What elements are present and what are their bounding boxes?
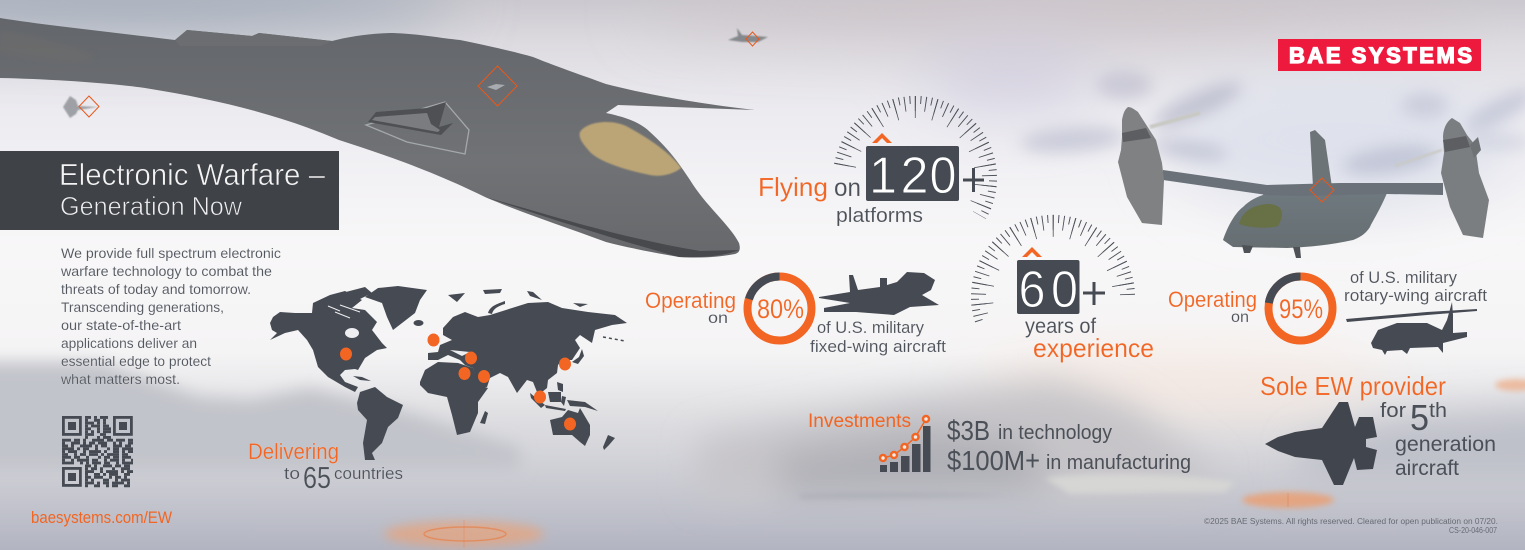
stat: operating on 95% rotary-wing: rotary-wing aircraft <box>1344 286 1487 305</box>
intro text block: Transcending generations, <box>61 299 224 315</box>
tail fin <box>1310 130 1332 187</box>
Africa <box>420 362 488 435</box>
stat: investments: Investments <box>808 411 911 432</box>
counter digits: 1 <box>869 147 897 205</box>
stat: 60+ years of experience: years of <box>1025 315 1096 338</box>
copyright note: CS-20-046-007 <box>1449 526 1497 535</box>
Japan <box>572 349 584 364</box>
title banner <box>0 151 339 230</box>
stat: sole EW provider: Sole EW provider <box>1260 371 1446 401</box>
Indonesia and Philippines <box>530 382 598 411</box>
donut 80 percent <box>748 276 812 340</box>
rotor blur <box>1019 71 1525 180</box>
stat: investments: in manufacturing <box>1046 452 1191 474</box>
Arctic Eurasia islands <box>448 289 588 307</box>
website link: baesystems.com/EW <box>31 508 172 527</box>
stat: operating on 80% fixed-wing: on <box>708 310 728 327</box>
stat: operating on 80% fixed-wing: of U.S. military <box>817 318 924 337</box>
stat: flying on 120+ platforms: Flying <box>758 172 828 202</box>
stat: operating on 95% rotary-wing: Operating <box>1168 287 1257 312</box>
stat: delivering to 65 countries <box>248 439 403 495</box>
copyright note: ©2025 BAE Systems. All rights reserved. Cleared for open publication on 07/20. <box>1204 517 1498 526</box>
stat: sole EW provider: aircraft <box>1395 457 1459 480</box>
icon: small aircraft with diamond, top <box>728 28 768 46</box>
stat: delivering to 65 countries: 65 <box>303 460 331 495</box>
right nacelle <box>1441 118 1489 238</box>
intro text block: We provide full spectrum electronic <box>61 245 281 261</box>
stat: operating on 95% rotary-wing: on <box>1231 309 1249 326</box>
caret <box>1022 247 1042 257</box>
fuselage <box>1223 186 1387 248</box>
stat: operating on 80% fixed-wing: fixed-wing aircraft <box>810 337 946 356</box>
donut 95 percent <box>1268 276 1332 340</box>
Iceland <box>414 320 424 326</box>
counter digits <box>1017 260 1080 319</box>
Kuril islands <box>603 337 625 341</box>
counter digits: 0 <box>930 147 956 205</box>
copyright note <box>1204 517 1498 535</box>
intro text block: threats of today and tomorrow. <box>61 281 251 297</box>
stat: investments: $3B <box>947 415 990 446</box>
stat: delivering to 65 countries: countries <box>334 464 403 483</box>
intro text block: essential edge to protect <box>61 353 211 369</box>
counter digits: 2 <box>900 147 928 205</box>
icon: small fighter with diamond, left <box>63 96 99 118</box>
main stealth aircraft <box>0 18 755 258</box>
stat: sole EW provider: 5 <box>1410 397 1429 438</box>
stat: 60+ years of experience: experience <box>1033 333 1154 363</box>
orange radar target: right edge <box>1495 379 1525 391</box>
Hudson Bay and Great Lakes cut-outs <box>328 305 470 356</box>
icon: helicopter silhouette <box>1346 302 1477 355</box>
Cuba <box>353 376 371 381</box>
icon: F-35 silhouette <box>1265 402 1377 485</box>
stat: sole EW provider: for <box>1380 400 1406 422</box>
counter digits <box>866 146 959 205</box>
Australia <box>550 408 590 446</box>
tracking diamond <box>1310 178 1334 202</box>
intro text block <box>60 245 281 387</box>
intro text block: what matters most. <box>60 371 180 387</box>
stat: flying on 120+ platforms: on <box>834 174 861 202</box>
gauge ticks <box>838 100 993 217</box>
caret <box>872 133 892 143</box>
Eurasia <box>428 302 627 393</box>
stat: flying on 120+ platforms: platforms <box>836 205 923 227</box>
title banner: Generation Now <box>60 191 242 221</box>
orange radar target: lower right <box>1242 492 1334 508</box>
stat: operating on 95% rotary-wing: 95% <box>1279 294 1323 324</box>
intake vent <box>366 102 469 154</box>
South America <box>357 387 403 460</box>
stat: operating on 80% fixed-wing: Operating <box>645 288 736 313</box>
stat: operating on 95% rotary-wing <box>1168 268 1487 355</box>
North America <box>270 291 387 392</box>
world map <box>270 286 627 460</box>
intro text block: applications deliver an <box>61 335 197 351</box>
icon: rising bar chart <box>880 416 930 472</box>
map location dots <box>340 334 576 430</box>
stat: investments: $100M+ <box>947 445 1040 476</box>
canopy <box>580 122 681 176</box>
QR code <box>62 417 133 486</box>
stat: 60+ years of experience <box>975 219 1154 363</box>
gauge ticks <box>975 219 1131 322</box>
stat: sole EW provider: generation <box>1395 433 1496 456</box>
stat: delivering to 65 countries: Delivering <box>248 439 339 464</box>
icon: tracked aircraft diamond, centre of hull <box>478 66 517 106</box>
stat: delivering to 65 countries: to <box>284 464 300 483</box>
Madagascar <box>480 411 488 424</box>
stat: operating on 80% fixed-wing: 80% <box>757 294 804 324</box>
Arctic islands <box>342 287 372 300</box>
stat: investments <box>808 411 1191 476</box>
orange radar target: bottom centre <box>384 520 544 548</box>
tiltrotor aircraft <box>1019 71 1525 258</box>
stat: sole EW provider: th <box>1429 400 1447 422</box>
stat: investments: in technology <box>998 422 1112 444</box>
title banner: Electronic Warfare – <box>59 157 326 192</box>
counter digits: 0 <box>1051 261 1078 319</box>
wing <box>1163 170 1443 196</box>
intro text block: our state-of-the-art <box>61 317 181 333</box>
icon: fighter jet silhouette <box>819 272 939 315</box>
stat: operating on 80% fixed-wing <box>645 272 946 356</box>
left nacelle <box>1118 107 1164 225</box>
New Zealand <box>603 435 615 450</box>
stat: flying on 120+ platforms <box>758 100 993 227</box>
stat: sole EW provider <box>1260 371 1496 485</box>
stat: operating on 95% rotary-wing: of U.S. military <box>1350 268 1457 287</box>
intro text block: warfare technology to combat the <box>60 263 272 279</box>
counter digits: 6 <box>1018 261 1046 319</box>
Greenland <box>365 286 427 330</box>
BAE Systems logo: BAE SYSTEMS <box>1289 43 1472 68</box>
